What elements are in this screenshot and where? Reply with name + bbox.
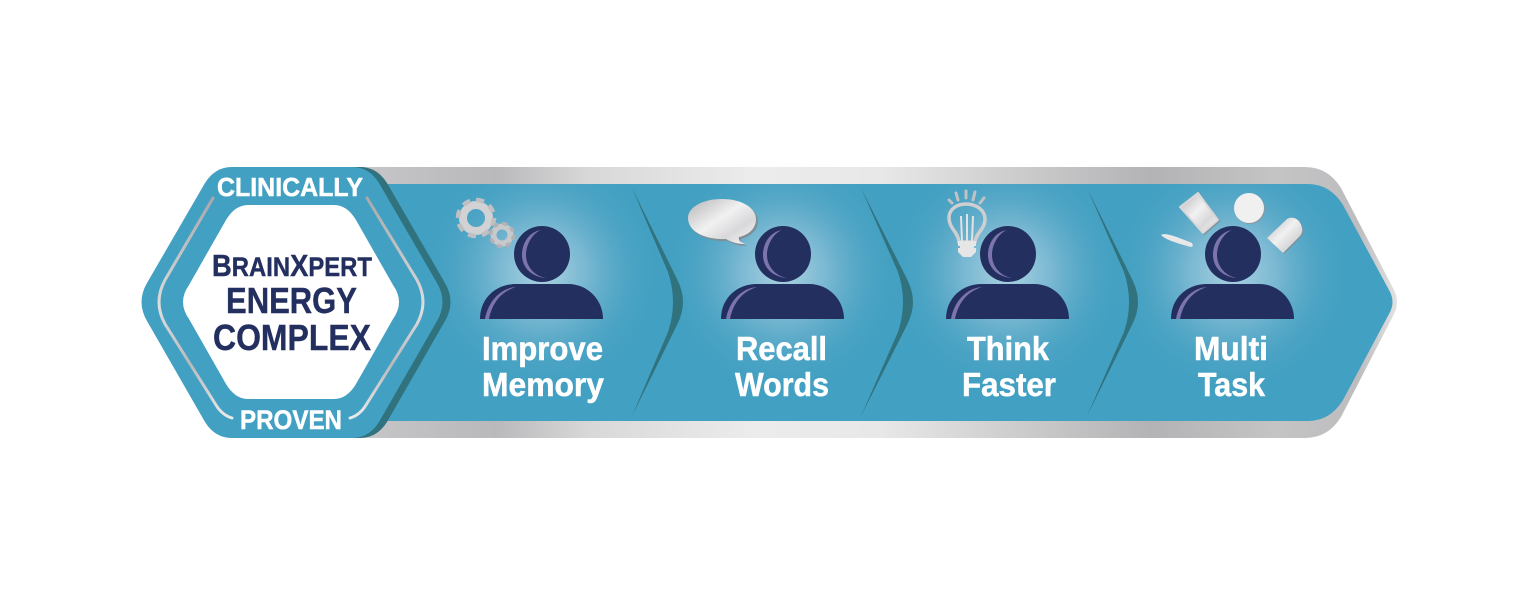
badge — [142, 167, 450, 438]
panel glows — [450, 184, 1324, 364]
person — [1171, 226, 1294, 319]
icon: light bulb — [949, 191, 985, 257]
brand name: ENERGY — [226, 280, 357, 321]
clinically label: CLINICALLY — [217, 172, 363, 202]
label: Task — [1198, 366, 1266, 403]
step: multi task — [1161, 193, 1303, 403]
brand name: BRAINXPERT — [212, 248, 372, 283]
step: think faster — [946, 191, 1069, 403]
chevron dividers — [632, 188, 1138, 416]
label — [735, 330, 829, 403]
brand name: COMPLEX — [213, 317, 371, 358]
label: Faster — [962, 366, 1056, 403]
label — [1194, 330, 1268, 403]
blue arrow panel — [360, 184, 1392, 421]
white centre — [183, 205, 399, 399]
infographic — [142, 167, 1397, 438]
icon: speech bubble — [688, 199, 758, 246]
brand name — [212, 248, 372, 358]
icon: pills — [1161, 193, 1303, 254]
label — [962, 330, 1056, 403]
step: improve memory — [458, 200, 605, 403]
person — [946, 226, 1069, 319]
icon: gears — [458, 200, 514, 246]
label: Recall — [736, 330, 827, 367]
label: Words — [735, 366, 829, 403]
silver band — [360, 167, 1397, 438]
person — [721, 226, 844, 319]
person — [480, 226, 603, 319]
label: Memory — [482, 366, 605, 403]
badge hexagon — [142, 167, 442, 438]
silver ring lines — [159, 198, 423, 418]
label: Multi — [1194, 330, 1268, 367]
label: Think — [967, 330, 1050, 367]
label: Improve — [482, 330, 603, 367]
proven label: PROVEN — [240, 405, 342, 435]
label — [482, 330, 605, 403]
step: recall words — [688, 199, 844, 403]
badge shadow — [240, 167, 450, 438]
